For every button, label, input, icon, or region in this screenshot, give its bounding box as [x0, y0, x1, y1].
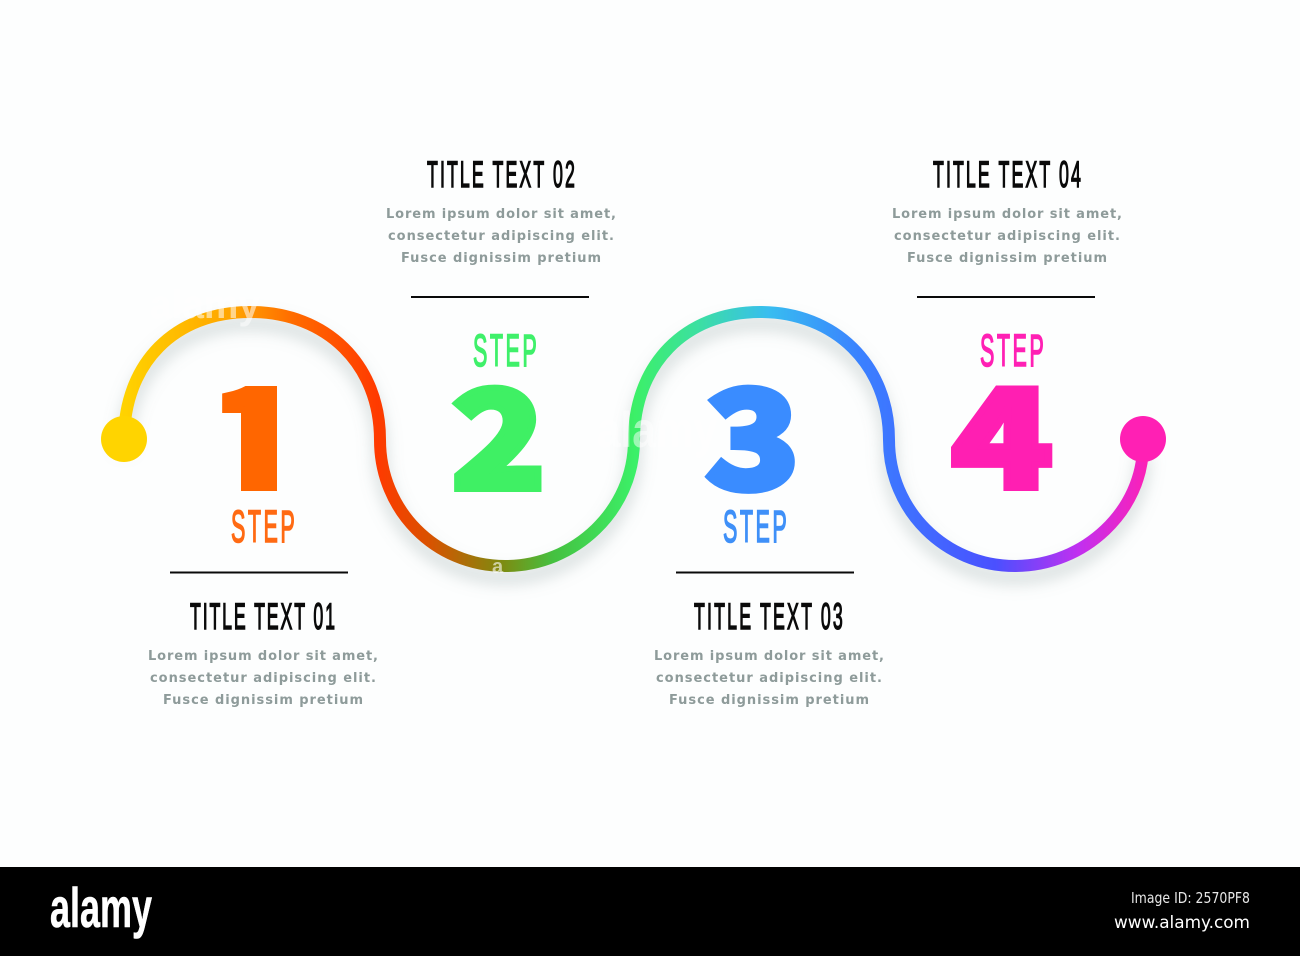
- body text 2: Fusce dignissim pretium: [401, 251, 601, 266]
- body text 1: [148, 649, 378, 708]
- footer bar: [0, 867, 1300, 956]
- title 4: TITLE TEXT 04: [933, 155, 1081, 196]
- step label 2: STEP: [473, 326, 537, 376]
- body text 4: Fusce dignissim pretium: [907, 251, 1107, 266]
- step 1 block: [149, 386, 377, 707]
- number 3: 3: [705, 331, 800, 529]
- body text 2: Lorem ipsum dolor sit amet,: [386, 207, 616, 222]
- step 4 block: [892, 155, 1122, 528]
- body text 4: consectetur adipiscing elit.: [894, 229, 1120, 244]
- title 1: TITLE TEXT 01: [190, 597, 335, 638]
- image id: Image ID: 2570PF8: [1131, 889, 1250, 907]
- step label 4: STEP: [980, 326, 1044, 376]
- body text 1: Fusce dignissim pretium: [163, 693, 363, 708]
- title 2: TITLE TEXT 02: [427, 155, 575, 196]
- body text 3: Lorem ipsum dolor sit amet,: [654, 649, 884, 664]
- body text 1: consectetur adipiscing elit.: [150, 671, 376, 686]
- body text 4: [892, 207, 1122, 266]
- step label 3: STEP: [723, 502, 787, 552]
- body text 2: [386, 207, 616, 266]
- icon: end dot: [1120, 416, 1166, 462]
- wavy timeline: [101, 312, 1166, 577]
- title 3: TITLE TEXT 03: [694, 597, 843, 638]
- number 1: 1: [218, 333, 294, 531]
- body text 3: Fusce dignissim pretium: [669, 693, 869, 708]
- footer logo: alamy: [50, 876, 152, 939]
- watermark overlays: [150, 283, 717, 578]
- watermark overlays: alamy: [597, 402, 717, 458]
- step 3 block: [654, 331, 884, 708]
- number 4: 4: [951, 330, 1053, 528]
- body text 2: consectetur adipiscing elit.: [388, 229, 614, 244]
- watermark overlays: a: [492, 556, 504, 578]
- step label 1: STEP: [231, 502, 295, 552]
- step 2 block: [386, 155, 616, 529]
- body text 3: consectetur adipiscing elit.: [656, 671, 882, 686]
- body text 1: Lorem ipsum dolor sit amet,: [148, 649, 378, 664]
- number 2: 2: [451, 331, 546, 529]
- watermark overlays: alamy: [150, 283, 261, 327]
- website: www.alamy.com: [1114, 913, 1250, 933]
- body text 4: Lorem ipsum dolor sit amet,: [892, 207, 1122, 222]
- icon: start dot: [101, 416, 147, 462]
- body text 3: [654, 649, 884, 708]
